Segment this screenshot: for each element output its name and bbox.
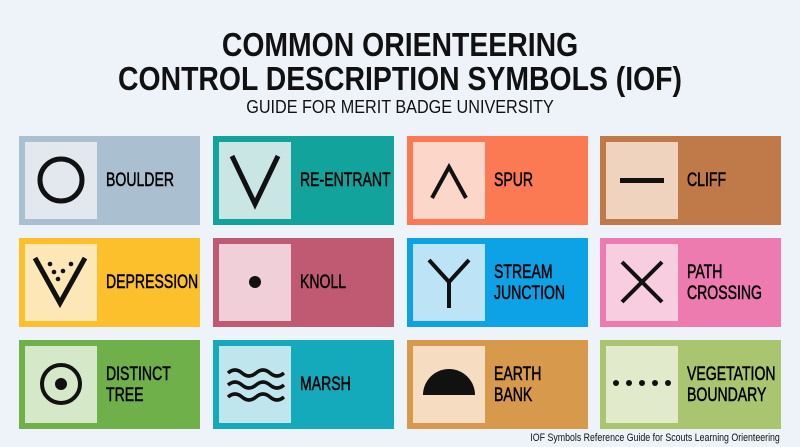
panel: cliff <box>600 136 781 225</box>
panel: vegetation boundary: BOUNDARY <box>687 384 766 406</box>
panel: distinct tree: TREE <box>106 384 144 406</box>
panel: stream junction: STREAM <box>494 262 553 282</box>
panel: boulder: BOULDER <box>106 170 174 191</box>
panel: path crossing: CROSSING <box>687 282 762 304</box>
panel: cliff: CLIFF <box>687 170 726 191</box>
panel: depression: DEPRESSION <box>106 272 198 293</box>
panel: path crossing: PATH <box>687 262 722 282</box>
panel: spur: SPUR <box>494 170 533 191</box>
panel: earth bank <box>407 340 588 429</box>
footer: IOF Symbols Reference Guide for Scouts Learning Orienteering <box>531 432 780 444</box>
panel: distinct tree <box>19 340 200 429</box>
panel: path crossing <box>600 238 781 327</box>
subtitle: GUIDE FOR MERIT BADGE UNIVERSITY <box>246 97 554 117</box>
panel: spur <box>407 136 588 225</box>
panel: marsh: MARSH <box>300 374 351 395</box>
panel: earth bank: EARTH <box>494 364 541 384</box>
title <box>118 26 682 97</box>
panel: re-entrant: RE-ENTRANT <box>300 170 391 191</box>
panel: marsh <box>213 340 394 429</box>
panel: boulder <box>19 136 200 225</box>
panel: stream junction <box>407 238 588 327</box>
title: COMMON ORIENTEERING <box>222 26 578 63</box>
panel: knoll <box>213 238 394 327</box>
panel: earth bank: BANK <box>494 384 532 406</box>
panel: vegetation boundary <box>600 340 781 429</box>
panel: re-entrant <box>213 136 394 225</box>
panel: knoll: KNOLL <box>300 272 346 293</box>
panel: vegetation boundary: VEGETATION <box>687 364 776 384</box>
panel: distinct tree: DISTINCT <box>106 364 171 384</box>
panel: stream junction: JUNCTION <box>494 282 565 304</box>
title: CONTROL DESCRIPTION SYMBOLS (IOF) <box>118 60 682 97</box>
panel: depression <box>19 238 200 327</box>
